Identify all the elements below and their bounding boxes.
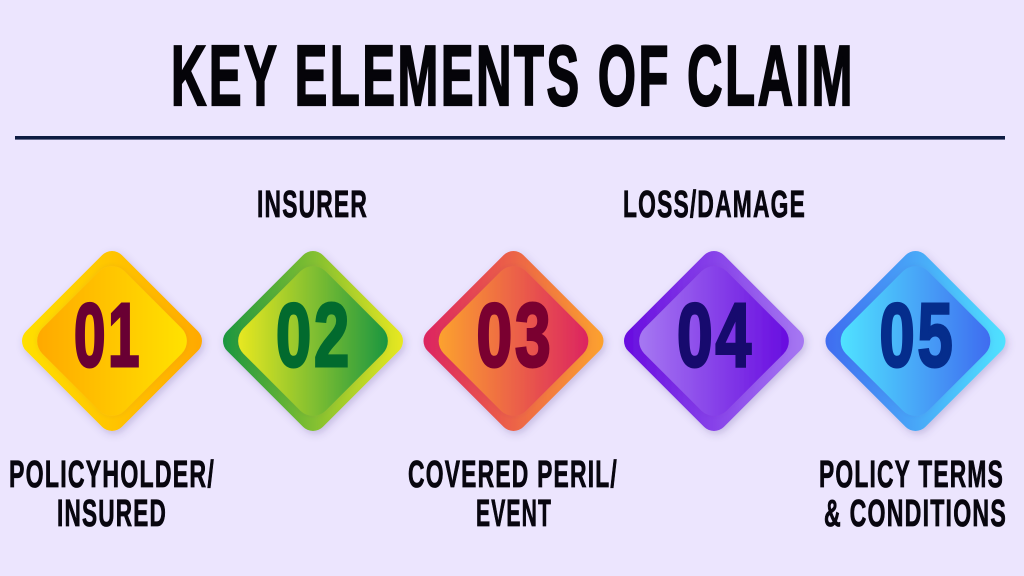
element 05: policy terms & conditions — [819, 251, 1007, 535]
label: covered peril/event — [408, 454, 618, 535]
label: policyholder/insured: INSURED — [57, 493, 167, 535]
icon: diamond 02: 02 — [276, 286, 352, 386]
element 02: insurer — [223, 184, 403, 431]
element 04: loss/damage — [623, 184, 806, 431]
icon: diamond 04: 04 — [677, 286, 754, 386]
icon: diamond 03: 03 — [476, 286, 554, 386]
label: covered peril/event: EVENT — [476, 493, 552, 535]
label: policy terms & conditions — [819, 454, 1007, 535]
icon: diamond 03 — [423, 251, 604, 431]
icon: diamond 02 — [223, 251, 403, 431]
element 03: covered peril/event — [408, 251, 618, 535]
element 01: policyholder/insured — [9, 251, 215, 535]
icon: diamond 01: 01 — [74, 286, 142, 386]
label: covered peril/event: COVERED PERIL/ — [408, 454, 618, 496]
icon: diamond 01 — [22, 251, 202, 431]
label: policyholder/insured: POLICYHOLDER/ — [9, 454, 215, 496]
label: loss/damage: LOSS/DAMAGE — [623, 184, 806, 226]
label: insurer: INSURER — [257, 184, 368, 226]
icon: diamond 04 — [624, 251, 804, 431]
label: policyholder/insured — [9, 454, 215, 535]
icon: diamond 05 — [825, 251, 1006, 431]
icon: diamond 05: 05 — [880, 286, 956, 386]
